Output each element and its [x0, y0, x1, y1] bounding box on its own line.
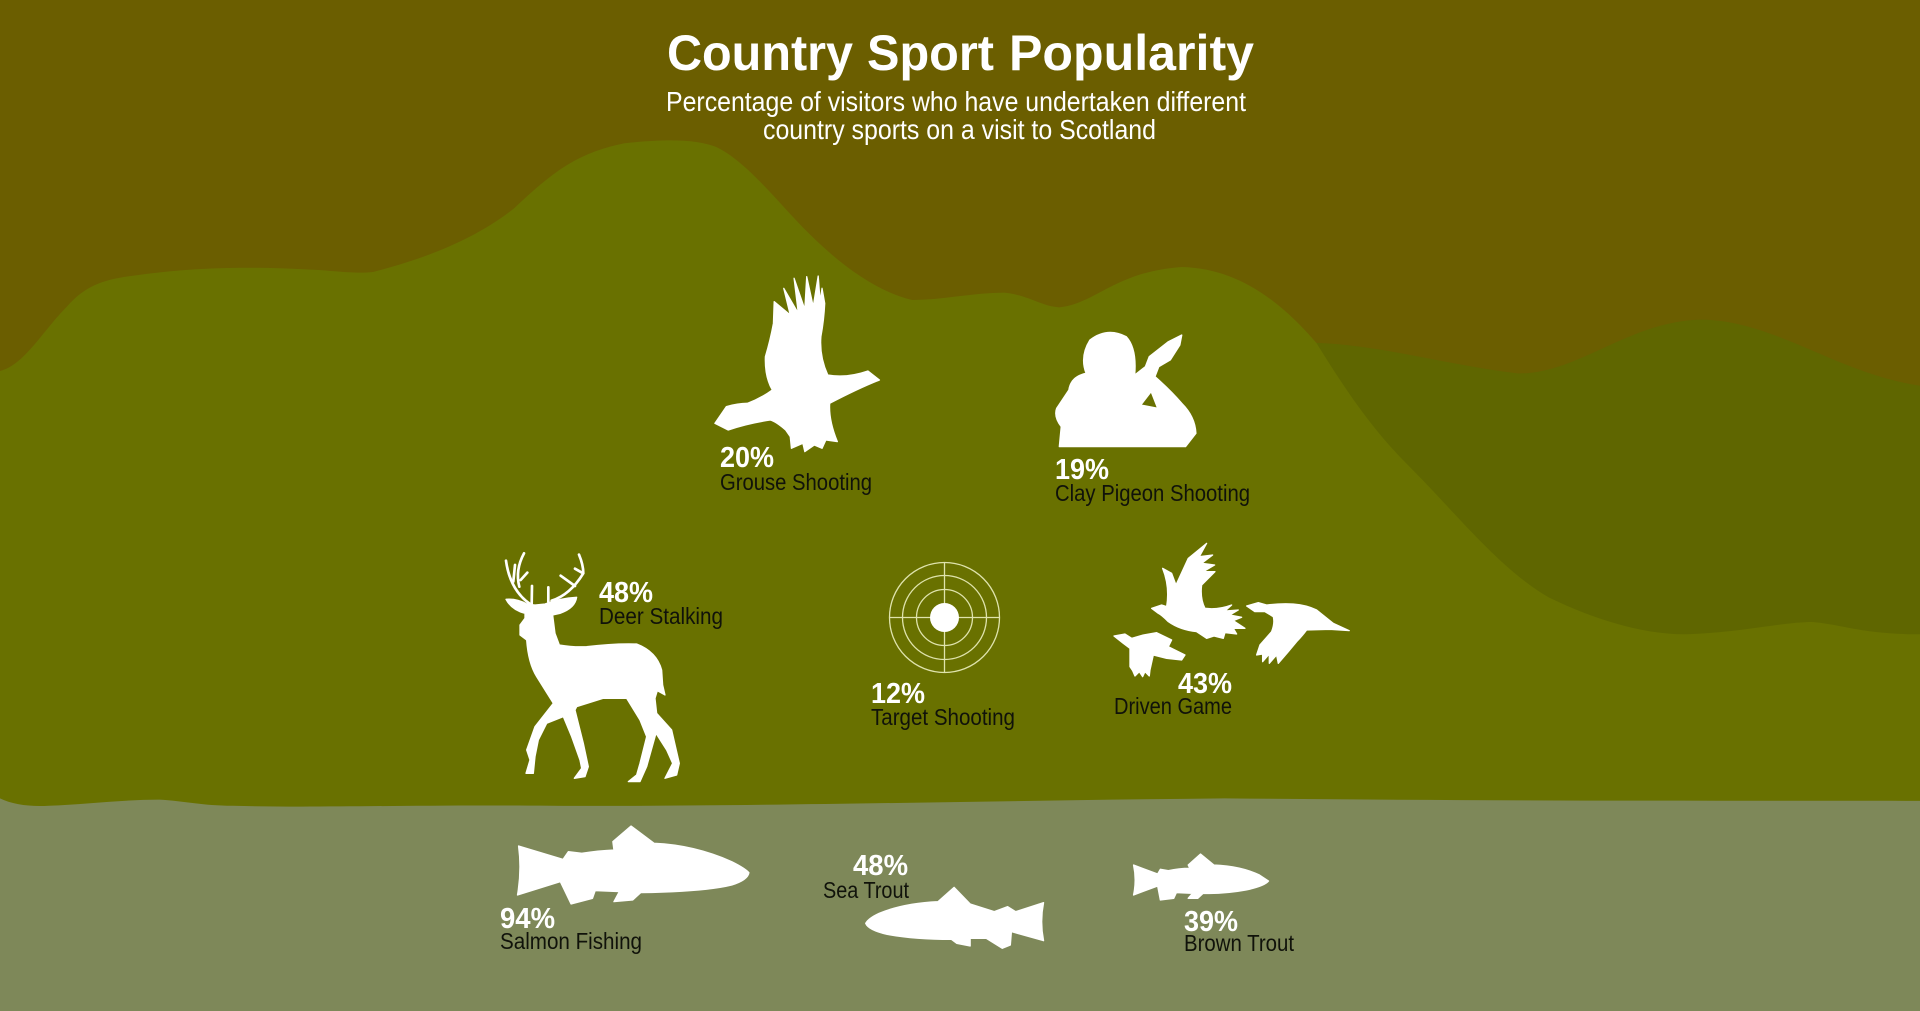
background: water: [0, 798, 1920, 1011]
label: target shooting: Target Shooting: [871, 704, 1015, 730]
label: target shooting: 12%: [871, 678, 925, 710]
label: clay pigeon shooting: Clay Pigeon Shooting: [1055, 480, 1250, 506]
icon: stag: [506, 553, 679, 782]
title: [667, 25, 1254, 81]
icon: target: [890, 562, 1000, 672]
label: grouse shooting: Grouse Shooting: [720, 469, 872, 495]
label: sea trout: [823, 850, 909, 903]
icon: driven game birds: [1114, 543, 1349, 677]
label: sea trout: Sea Trout: [823, 877, 909, 903]
label: salmon fishing: 94%: [500, 903, 555, 935]
subtitle: [666, 86, 1246, 145]
label: target shooting: [871, 678, 1015, 730]
icon: grouse in flight: [715, 276, 879, 452]
subtitle: country sports on a visit to Scotland: [763, 114, 1156, 145]
label: driven game: Driven Game: [1114, 693, 1232, 719]
background: main green hills: [0, 140, 1920, 857]
icon: clay pigeon shooter: [1056, 332, 1196, 447]
label: clay pigeon shooting: 19%: [1055, 454, 1109, 486]
title: Popularity: [1009, 25, 1254, 81]
title: Sport: [867, 25, 994, 81]
subtitle: Percentage of visitors who have undertaken different: [666, 86, 1246, 117]
label: deer stalking: Deer Stalking: [599, 603, 723, 629]
title: Country: [667, 25, 853, 81]
label: driven game: [1114, 668, 1232, 719]
label: brown trout: [1184, 906, 1294, 956]
label: salmon fishing: [500, 903, 642, 954]
label: driven game: 43%: [1178, 668, 1232, 700]
icon: salmon: [517, 826, 749, 904]
label: salmon fishing: Salmon Fishing: [500, 928, 642, 954]
label: grouse shooting: [720, 442, 872, 495]
label: sea trout: 48%: [853, 850, 908, 882]
label: deer stalking: 48%: [599, 577, 653, 609]
label: clay pigeon shooting: [1055, 454, 1250, 506]
icon: brown trout: [1134, 854, 1269, 900]
label: brown trout: 39%: [1184, 906, 1238, 938]
label: deer stalking: [599, 577, 723, 629]
background: far right hill: [1316, 320, 1920, 735]
label: grouse shooting: 20%: [720, 442, 774, 474]
label: brown trout: Brown Trout: [1184, 930, 1294, 956]
icon: sea trout: [866, 887, 1044, 948]
